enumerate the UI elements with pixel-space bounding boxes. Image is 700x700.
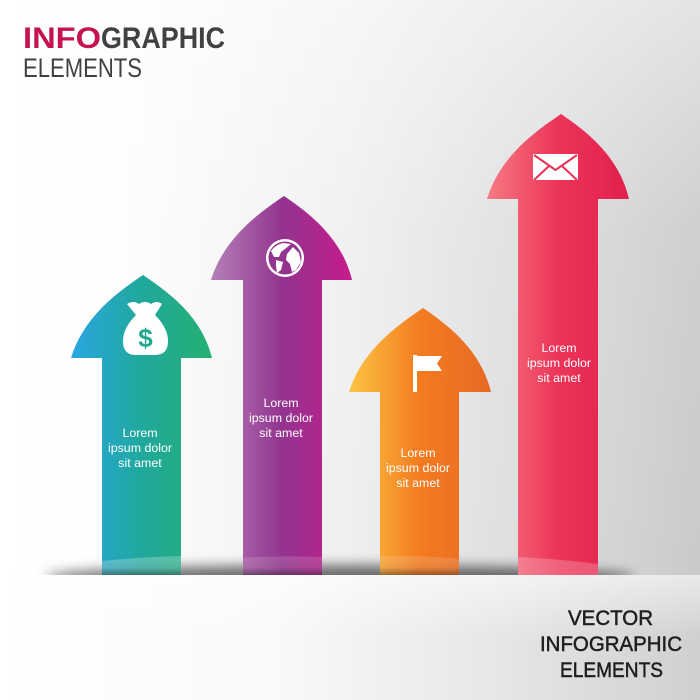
arrow: globe bbox=[211, 196, 352, 575]
bottom caption: ELEMENTS bbox=[560, 659, 663, 682]
label: Lorem bbox=[541, 341, 577, 355]
label: Lorem bbox=[122, 426, 158, 440]
shaft shadow bbox=[380, 560, 459, 575]
title: INFO bbox=[23, 22, 101, 55]
shaft reflection bbox=[380, 556, 459, 575]
label: sit amet bbox=[259, 426, 303, 440]
bottom caption: INFOGRAPHIC bbox=[540, 633, 682, 656]
arrow: money bbox=[71, 275, 212, 575]
icon: money bag: $ bbox=[138, 323, 153, 353]
shaft shadow bbox=[102, 560, 181, 575]
label: sit amet bbox=[537, 371, 581, 385]
shaft shadow bbox=[243, 560, 322, 575]
label: sit amet bbox=[396, 476, 440, 490]
shaft reflection bbox=[102, 556, 181, 575]
label: Lorem bbox=[263, 396, 299, 410]
icon: flag bbox=[413, 355, 442, 392]
bottom caption bbox=[540, 607, 682, 682]
arrow: flag bbox=[349, 308, 491, 575]
label: Lorem bbox=[400, 446, 436, 460]
arrow: mail bbox=[487, 114, 629, 575]
label: ipsum dolor bbox=[249, 411, 313, 425]
label: ipsum dolor bbox=[386, 461, 450, 475]
title: GRAPHIC bbox=[101, 22, 225, 55]
shaft reflection bbox=[518, 557, 598, 575]
label: ipsum dolor bbox=[108, 441, 172, 455]
icon: money bag bbox=[123, 302, 168, 355]
label: ipsum dolor bbox=[527, 356, 591, 370]
label: sit amet bbox=[118, 456, 162, 470]
icon: globe bbox=[266, 239, 304, 277]
title bbox=[23, 22, 225, 83]
bottom caption: VECTOR bbox=[568, 607, 653, 630]
shaft reflection bbox=[243, 556, 322, 575]
icon: envelope bbox=[533, 154, 578, 180]
floor shadow bbox=[42, 556, 638, 575]
title: ELEMENTS bbox=[23, 53, 142, 83]
